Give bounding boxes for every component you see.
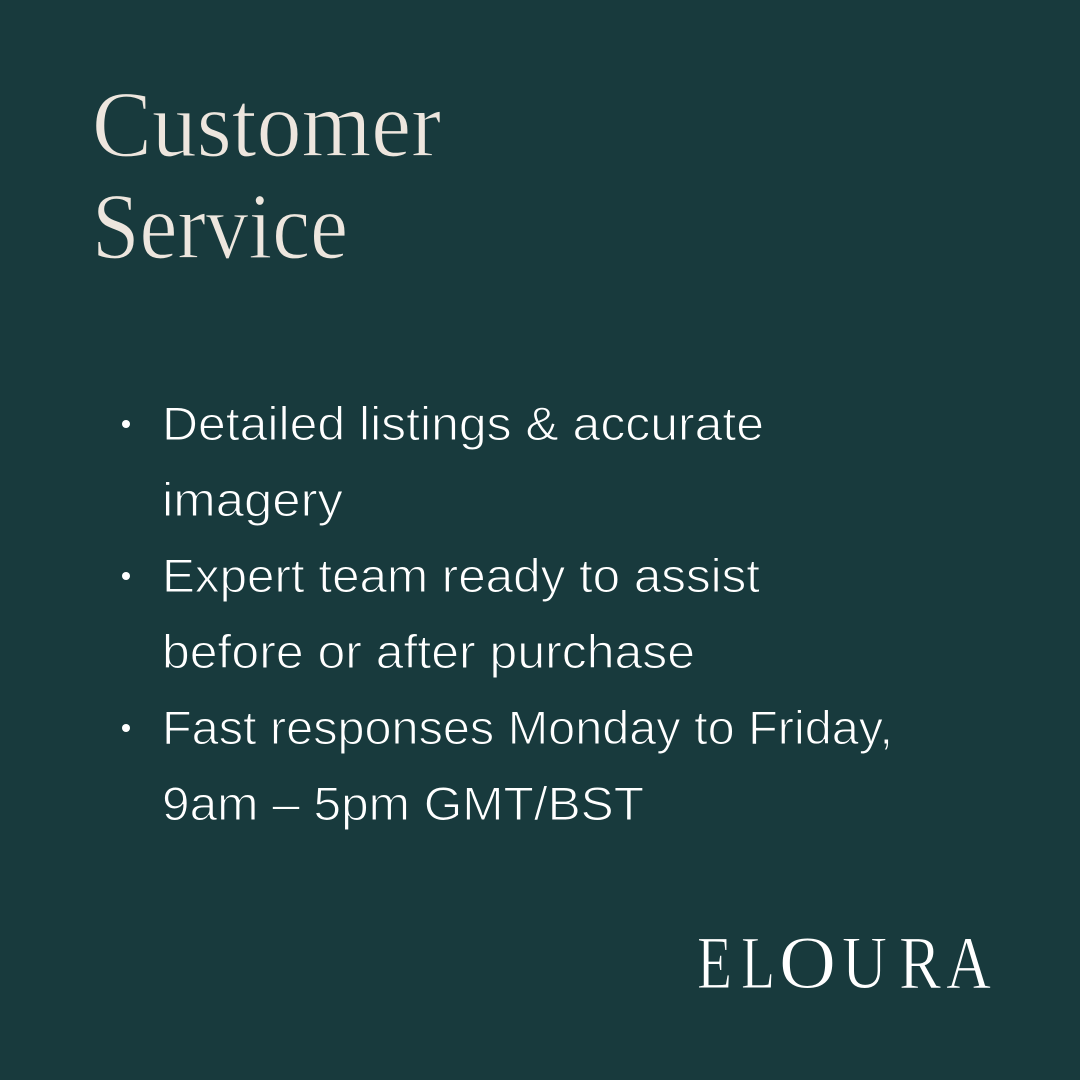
bullet item: response hours	[122, 701, 893, 830]
bullet item: expert team: before or after purchase	[162, 625, 695, 678]
logo wordmark: R	[899, 922, 941, 1005]
logo wordmark: O	[779, 922, 836, 1005]
logo wordmark: A	[946, 922, 991, 1005]
bullet item: response hours: Fast responses Monday to Friday,	[162, 701, 893, 754]
bullet item: expert team: Expert team ready to assist	[162, 549, 760, 602]
logo wordmark: E	[697, 922, 732, 1005]
title: Customer	[92, 73, 441, 177]
bullet item: expert team	[122, 549, 760, 678]
bullet item: listings: imagery	[162, 473, 344, 526]
bullet item: response hours: 9am – 5pm GMT/BST	[162, 777, 644, 830]
bullet item: listings: Detailed listings & accurate	[162, 397, 764, 450]
title: Service	[92, 175, 348, 279]
bullet list	[122, 397, 893, 830]
title	[92, 73, 441, 279]
logo wordmark: L	[741, 922, 775, 1005]
bullet item: listings	[122, 397, 764, 526]
logo wordmark: U	[842, 922, 887, 1005]
